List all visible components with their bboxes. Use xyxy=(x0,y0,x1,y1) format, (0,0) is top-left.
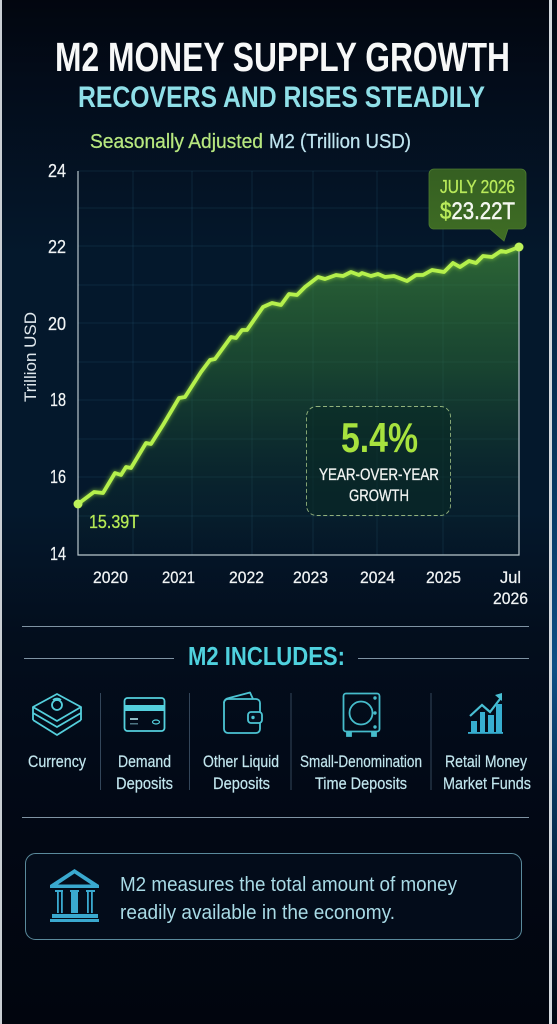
icon: safe xyxy=(344,694,380,736)
chart heading xyxy=(90,131,411,153)
callout: year-over-year growth: 5.4% xyxy=(341,414,418,461)
label: demand deposits: Demand xyxy=(118,752,171,771)
definition text: readily available in the economy. xyxy=(120,901,395,924)
chart heading: Seasonally Adjusted xyxy=(90,131,263,153)
data line xyxy=(78,247,519,504)
axes xyxy=(78,171,519,555)
y axis tick labels: 14 xyxy=(50,544,66,564)
chart heading: M2 (Trillion USD) xyxy=(269,131,411,153)
y axis title: Trillion USD xyxy=(21,312,40,402)
icon: growth chart xyxy=(468,693,503,734)
section heading: M2 INCLUDES: xyxy=(188,641,345,671)
subtitle: RECOVERS AND RISES STEADILY xyxy=(78,81,485,114)
label: currency: Currency xyxy=(28,752,86,771)
x axis labels: 2025 xyxy=(426,568,461,587)
label: demand deposits: Deposits xyxy=(116,774,173,793)
label: small-denomination time deposits: Small-Denomination xyxy=(300,752,422,771)
y axis tick labels: 18 xyxy=(50,390,66,410)
x axis labels: 2023 xyxy=(293,568,328,587)
data line glow xyxy=(78,247,519,504)
y axis tick labels: 22 xyxy=(48,237,66,257)
x axis labels: 2022 xyxy=(229,568,264,587)
callout: year-over-year growth xyxy=(306,406,450,516)
label: other liquid deposits xyxy=(203,752,279,793)
panel: definition xyxy=(26,854,522,940)
definition text xyxy=(120,873,458,924)
x axis labels: 2020 xyxy=(93,568,128,587)
label: small-denomination time deposits: Time Deposits xyxy=(315,774,407,793)
icon: bank building xyxy=(50,869,99,922)
y axis tick labels: 20 xyxy=(48,314,66,334)
callout: latest value: JULY 2026 xyxy=(440,177,515,197)
x axis labels: 2021 xyxy=(162,568,195,587)
y axis tick labels xyxy=(48,161,66,564)
y axis tick labels: 16 xyxy=(50,467,66,487)
callout: latest value xyxy=(429,169,526,241)
x axis labels: 2026 xyxy=(493,589,528,608)
icon: wallet xyxy=(224,692,262,733)
label: other liquid deposits: Other Liquid xyxy=(203,752,279,771)
label: retail money market funds xyxy=(443,752,531,793)
start point marker xyxy=(74,500,82,508)
definition text: M2 measures the total amount of money xyxy=(120,873,458,896)
end point marker xyxy=(514,242,524,252)
callout: year-over-year growth: YEAR-OVER-YEAR xyxy=(319,465,439,484)
icon: bank card xyxy=(124,698,164,731)
x axis labels xyxy=(93,568,528,608)
label: small-denomination time deposits xyxy=(300,752,422,793)
line chart xyxy=(21,161,528,608)
callout: year-over-year growth: GROWTH xyxy=(349,486,409,505)
label: demand deposits xyxy=(116,752,173,793)
callout: latest value: $23.22T xyxy=(440,198,515,225)
y axis tick labels: 24 xyxy=(48,161,66,181)
x axis labels: Jul xyxy=(500,568,521,587)
icon: currency stack xyxy=(33,694,81,735)
label: retail money market funds: Retail Money xyxy=(445,752,527,771)
area under line xyxy=(78,247,519,555)
x axis labels: 2024 xyxy=(360,568,395,587)
label: other liquid deposits: Deposits xyxy=(213,774,270,793)
label: retail money market funds: Market Funds xyxy=(443,774,531,793)
start value label: 15.39T xyxy=(89,512,139,532)
